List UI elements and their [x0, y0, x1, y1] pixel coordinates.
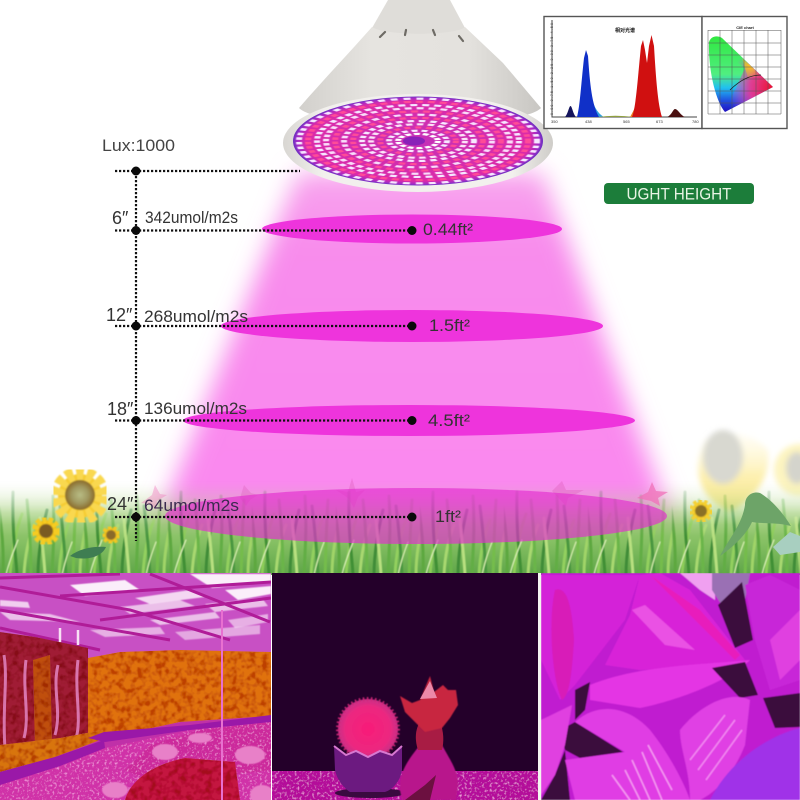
lux label: Lux:1000 [102, 136, 175, 155]
grass blades [0, 490, 800, 574]
measurement labels [102, 136, 474, 526]
bottom right violet leaf [710, 728, 800, 800]
badge background [604, 183, 754, 204]
flower highlight [420, 681, 437, 699]
x axis labels: 438 [585, 119, 592, 124]
pot rim [334, 746, 402, 757]
roof background [0, 573, 271, 658]
chromaticity title: CIE chart [736, 25, 754, 30]
flower stem [416, 722, 443, 750]
lamp body [299, 27, 541, 124]
orange foreground shrubs [0, 730, 103, 772]
bright upper leaf [605, 573, 745, 670]
vertical axis [135, 172, 137, 541]
rocky bank [126, 722, 271, 776]
dark centre gaps [541, 582, 800, 800]
flower petals [400, 676, 458, 732]
icon: tiny sunflower [104, 528, 118, 542]
pale rocks [102, 733, 274, 800]
line 24 inch [115, 516, 412, 518]
measure nodes [132, 166, 416, 522]
icon: large faded sunflower [698, 430, 769, 512]
area 1: 1ft² [435, 508, 462, 526]
node 24 inch [132, 512, 140, 522]
node lux [132, 166, 140, 176]
lamp [283, 0, 553, 192]
y axis labels: 0.00 0.75 1.50 2.25 3.00 3.75 4.50 [550, 23, 554, 115]
pale stripes on wall [4, 655, 78, 748]
ppfd 342: 342umol/m2s [145, 209, 238, 227]
ppfd 136: 136umol/m2s [144, 400, 247, 418]
spectrum frame [544, 16, 702, 128]
vertical leaf [551, 589, 574, 700]
magenta floor [272, 771, 538, 800]
ellipse 6 inch [262, 214, 562, 244]
coverage ellipses [165, 214, 667, 544]
ppfd 268: 268umol/m2s [144, 308, 248, 326]
leaf highlights [632, 605, 695, 650]
lux line [115, 170, 300, 172]
badge text: UGHT HEIGHT [626, 186, 732, 204]
LED rings [299, 99, 537, 183]
central pale leaf [590, 660, 750, 708]
leaves backdrop [541, 573, 800, 800]
dark backdrop [272, 573, 538, 771]
red peaks [632, 35, 662, 117]
vase shadow [405, 775, 436, 800]
LED face [293, 96, 543, 186]
spectrum title: 相对光谱 [615, 27, 635, 34]
dotted measure lines [115, 171, 412, 541]
grass base colour [0, 488, 800, 575]
icon: large leaf right [720, 493, 791, 556]
icon: flower centre [240, 485, 258, 506]
node 12 inch [132, 322, 140, 330]
support posts [60, 628, 78, 645]
plants right [692, 493, 800, 556]
thin pale post [221, 610, 223, 800]
small violet peak [565, 106, 576, 117]
purple kerbs [0, 715, 271, 785]
left lower leaf [541, 705, 572, 795]
upper leaf red stripe [650, 575, 740, 660]
roof trusses [0, 574, 271, 650]
icon: leaf left [70, 547, 106, 559]
height 12: 12″ [106, 305, 133, 325]
node 6 inch [132, 226, 140, 235]
blue peak [577, 50, 599, 117]
pink butterflies and flowers [141, 478, 668, 510]
end node 12 inch [408, 322, 416, 330]
right ribs [690, 715, 742, 780]
black body curve [730, 75, 761, 90]
yellow area [742, 58, 760, 78]
horseshoe [709, 36, 773, 112]
ellipse 24 inch [165, 488, 667, 544]
faded sunflowers upper right [698, 430, 800, 512]
chart grid [708, 30, 781, 114]
deep red peak [667, 109, 685, 117]
LED hub [403, 136, 425, 146]
ellipse 18 inch [183, 405, 635, 436]
end node 24 inch [408, 512, 416, 522]
lamp rim [283, 94, 553, 192]
orange strip on wall [33, 655, 52, 750]
grey corner [712, 573, 751, 604]
orange hedge [88, 650, 271, 740]
cactus [338, 699, 398, 759]
lamp neck [367, 0, 470, 44]
pot shadow [335, 789, 402, 798]
line 18 inch [115, 419, 412, 422]
sunflowers left [35, 474, 118, 559]
icon: pale leaves corner [773, 532, 800, 555]
light cone [148, 172, 682, 548]
photo: leaves [541, 573, 800, 800]
badge: light height [604, 183, 754, 204]
gravel ground [0, 722, 271, 800]
right pale leaf [770, 610, 800, 680]
end node 18 inch [408, 416, 416, 425]
grass strip [0, 488, 800, 575]
spectrum axes [552, 20, 697, 117]
area 0.44: 0.44ft² [423, 221, 474, 239]
x axis labels [551, 119, 699, 124]
right tall leaf [745, 575, 800, 690]
icon: large sunflower [58, 474, 102, 518]
icon: small sunflower [35, 520, 57, 542]
dark red plant wall [0, 632, 88, 752]
line 12 inch [115, 325, 412, 327]
area 4.5: 4.5ft² [428, 412, 471, 430]
x axis labels: 350 [551, 119, 558, 124]
icon: flower right of centre [552, 481, 584, 506]
height 18: 18″ [107, 399, 134, 419]
area 1.5: 1.5ft² [429, 317, 471, 335]
end node 6 inch [408, 226, 416, 235]
icon: edge faded sunflower [774, 444, 800, 496]
icon: flower mid [336, 478, 365, 508]
orange edge [630, 96, 642, 117]
spectrum chart panel [544, 16, 702, 128]
photo gap [538, 573, 541, 800]
photo base [0, 716, 270, 785]
icon: flower left [141, 485, 167, 510]
ppfd 64: 64umol/m2s [144, 497, 239, 515]
chromaticity frame [702, 16, 787, 128]
cyan tail [588, 90, 604, 117]
photo: potted plants [272, 573, 538, 800]
light corner [680, 573, 715, 600]
chromaticity chart panel [702, 16, 787, 128]
height 6: 6″ [112, 208, 129, 228]
vase [400, 745, 458, 800]
icon: flower right [637, 482, 668, 506]
x axis labels: 673 [656, 119, 663, 124]
leaf ribs lower left [612, 745, 672, 800]
photo: greenhouse [0, 573, 274, 800]
pot [334, 746, 402, 792]
lower right leaves [680, 697, 750, 800]
height 24: 24″ [107, 494, 134, 514]
icon: small sunflower right [692, 502, 710, 520]
ellipse 12 inch [221, 310, 603, 342]
red area [709, 36, 773, 112]
vent slots [380, 30, 463, 41]
roof panels [0, 574, 271, 640]
lower left leaf [565, 709, 690, 800]
node 18 inch [132, 416, 140, 425]
x axis labels: 565 [623, 119, 630, 124]
red garden bed [125, 758, 240, 800]
line 6 inch [115, 229, 412, 232]
upper left leaves [541, 575, 640, 700]
green yellow bridge [598, 116, 634, 117]
x axis labels: 780 [692, 119, 699, 124]
